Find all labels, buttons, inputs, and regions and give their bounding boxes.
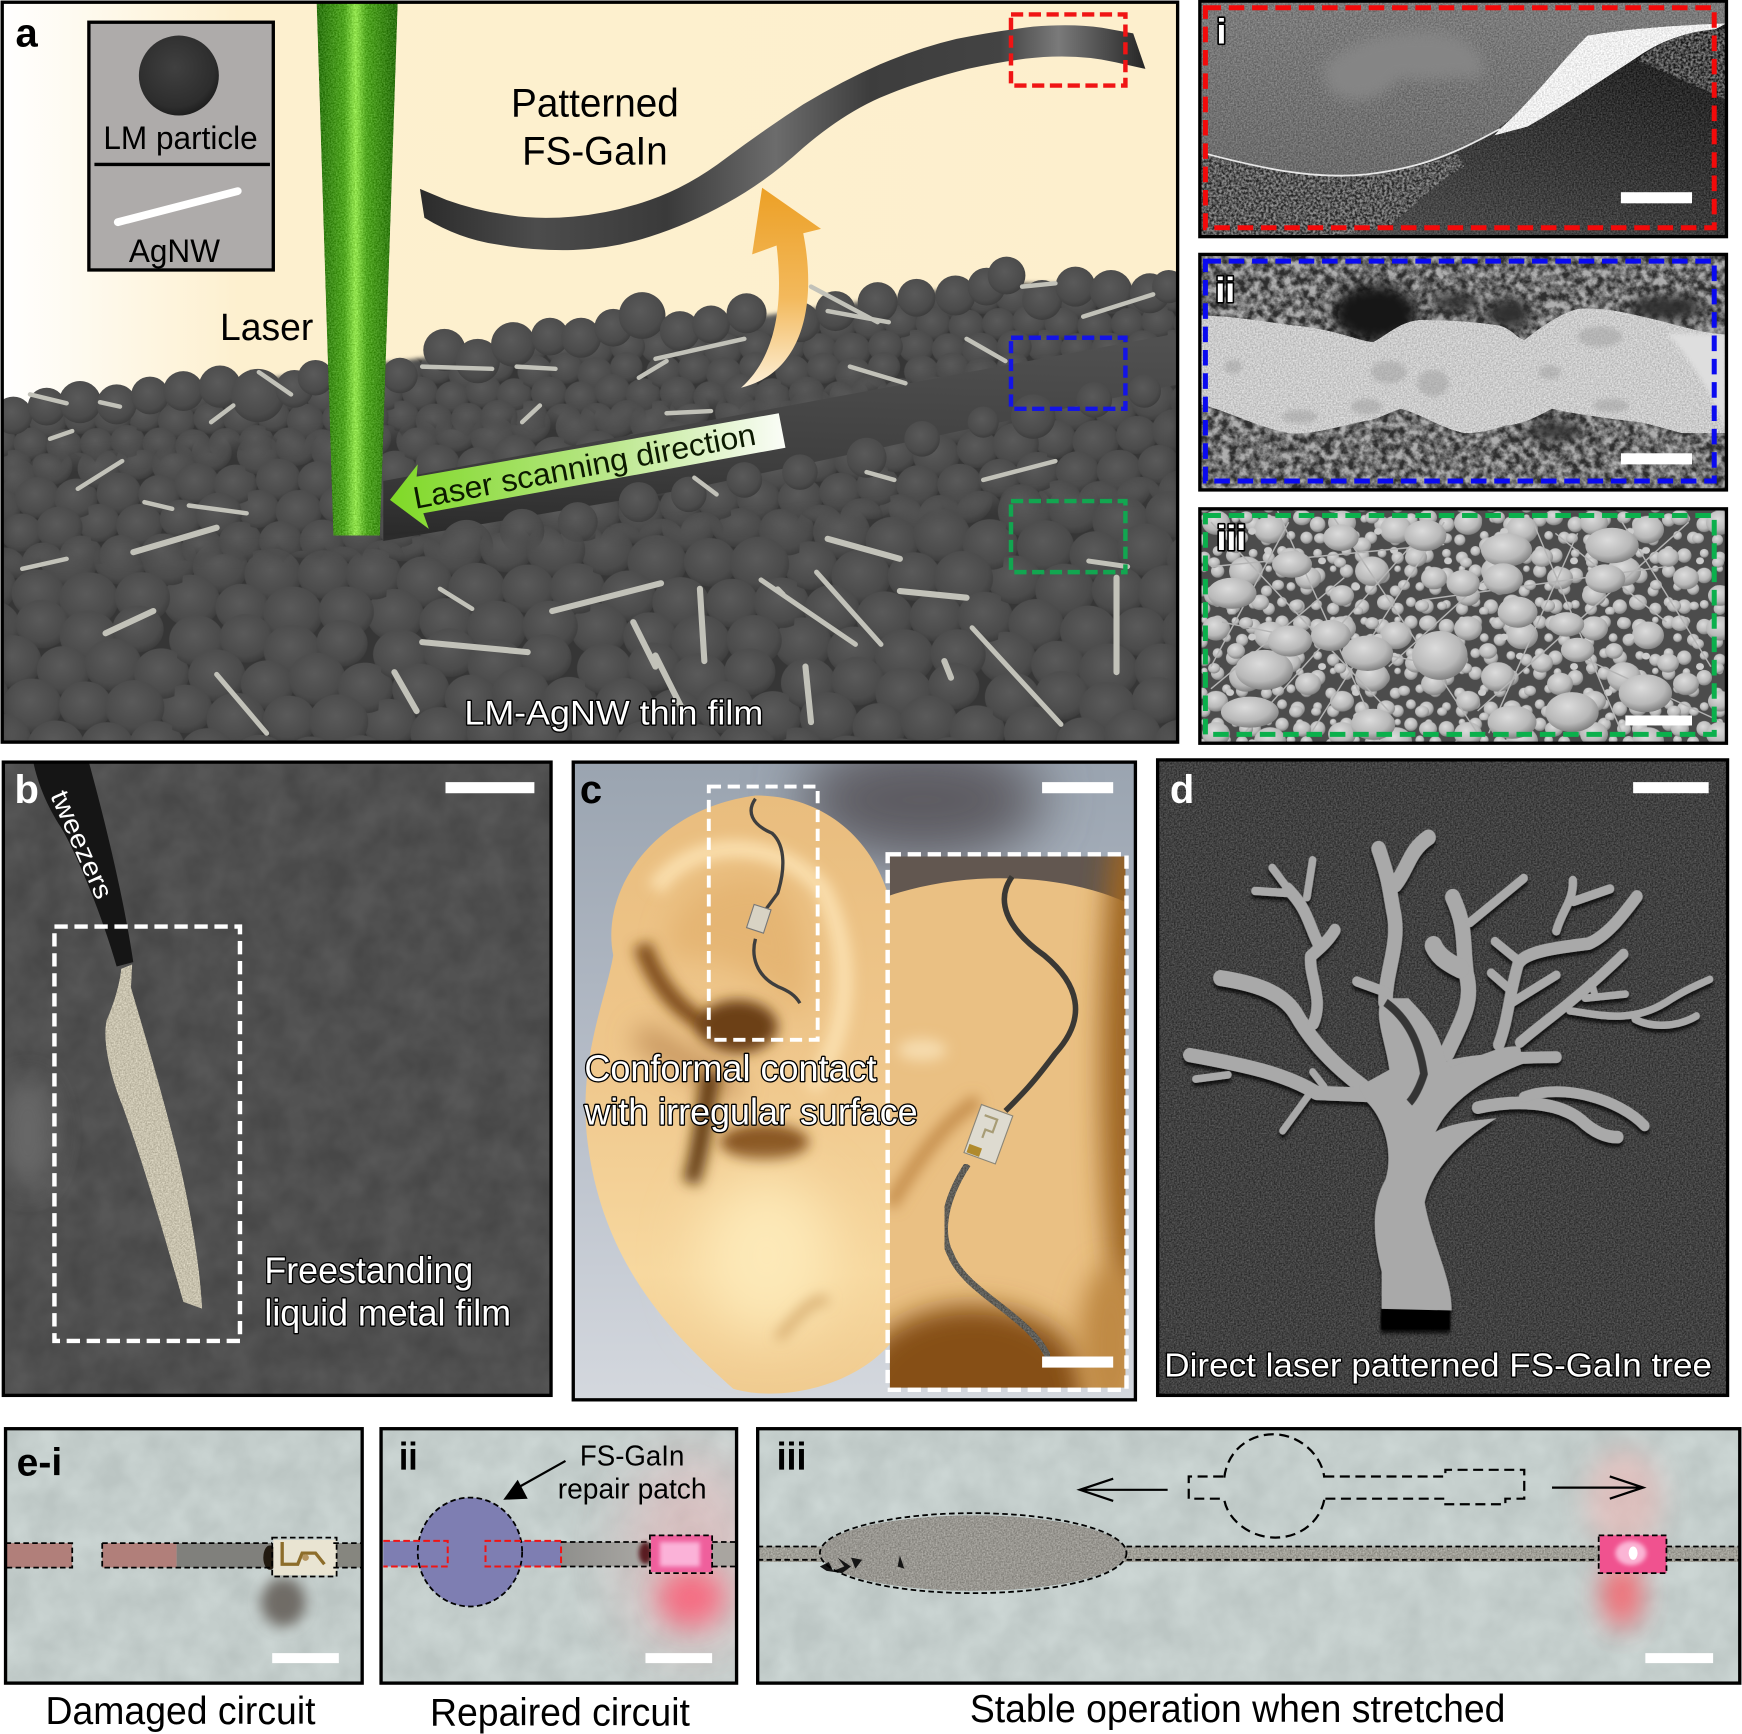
arrow to patch xyxy=(503,1461,565,1500)
inset wire xyxy=(1004,877,1076,1111)
label: freestanding film xyxy=(264,1250,511,1333)
icon: LM particle xyxy=(139,36,219,116)
green laser beam xyxy=(317,2,398,535)
panel c: conformal contact on ear xyxy=(572,760,1138,1402)
liquid metal film blade xyxy=(105,964,202,1309)
label: tree caption: Direct laser patterned FS-GaIn tree xyxy=(1164,1347,1712,1384)
scale bar xyxy=(1625,715,1692,725)
label: freestanding film: Freestanding xyxy=(264,1250,473,1291)
damaged trace segments xyxy=(6,1543,72,1568)
label: c: c xyxy=(580,768,602,812)
scale bar xyxy=(445,782,534,793)
label: i: i xyxy=(1217,11,1226,51)
blue repair patch xyxy=(383,1498,561,1606)
label: ii: ii xyxy=(399,1436,418,1479)
small LED xyxy=(747,904,771,933)
caption: damaged circuit: Damaged circuit xyxy=(46,1690,316,1733)
label: iii: iii xyxy=(777,1436,807,1479)
ear shape xyxy=(585,795,894,1394)
patterned FS-GaIn ribbon xyxy=(420,25,1145,250)
LM-AgNW film particles xyxy=(4,256,1176,568)
red region marker xyxy=(1011,14,1125,86)
scale bar xyxy=(1633,782,1709,793)
orange lift-off arrow xyxy=(741,188,821,388)
panel b: freestanding film xyxy=(1,762,551,1395)
arrow: stretch right xyxy=(1552,1476,1643,1499)
label: FS-GaIn repair patch xyxy=(558,1440,707,1506)
label: scanning direction: Laser scanning direction xyxy=(410,417,758,516)
blue region marker xyxy=(1011,338,1125,409)
label: Patterned FS-GaIn: FS-GaIn xyxy=(522,129,668,173)
label: tweezers: tweezers xyxy=(45,786,119,903)
red glow xyxy=(1586,1449,1662,1551)
caption: repaired circuit: Repaired circuit xyxy=(430,1691,690,1734)
label: FS-GaIn repair patch: FS-GaIn xyxy=(580,1440,684,1472)
label: iii: iii xyxy=(1217,518,1246,558)
panel a-i: SEM ribbon edge xyxy=(1200,1,1726,237)
label: a: a xyxy=(16,12,39,56)
label: Patterned FS-GaIn: Patterned xyxy=(511,82,679,126)
repaired trace xyxy=(561,1542,650,1566)
inset legend: LM particle and AgNW xyxy=(89,22,273,270)
label: d: d xyxy=(1170,768,1194,812)
FS-GaIn tree xyxy=(1190,837,1710,1330)
patterned channel in film xyxy=(383,333,1178,541)
scale bar xyxy=(1645,1653,1713,1663)
ear wire xyxy=(751,799,800,1003)
green dashed frame xyxy=(1205,515,1714,734)
label: conformal contact: with irregular surface xyxy=(583,1091,918,1132)
panel e-i: damaged circuit xyxy=(6,1429,362,1683)
label: LM-AgNW thin film: LM-AgNW thin film xyxy=(464,694,763,732)
icon: AgNW xyxy=(118,191,238,222)
panel a-ii: SEM wavy line xyxy=(1200,254,1726,490)
zoomed inset xyxy=(885,852,1129,1392)
lit LED xyxy=(639,1535,712,1573)
inset LED xyxy=(964,1105,1013,1164)
tweezers xyxy=(33,762,133,967)
panel d: laser patterned tree xyxy=(1158,760,1728,1395)
panel e-iii: stable when stretched xyxy=(758,1429,1740,1683)
scale bar inset xyxy=(1042,1356,1113,1368)
stretched patch xyxy=(820,1515,1127,1591)
scale bar top xyxy=(1042,782,1113,793)
arrow: stretch left xyxy=(1080,1479,1168,1501)
label: b: b xyxy=(14,768,39,812)
LED shadow xyxy=(261,1578,306,1626)
stretched trace xyxy=(758,1546,1740,1562)
scale bar xyxy=(272,1653,339,1663)
panel e-ii: repaired circuit xyxy=(381,1429,758,1683)
red dashed frame xyxy=(1205,8,1714,228)
label: e-i: e-i xyxy=(17,1441,62,1484)
green region marker xyxy=(1011,501,1125,572)
label: conformal contact xyxy=(583,1048,918,1132)
panel a-iii: SEM particles and nanowires xyxy=(1200,509,1726,743)
label: ii: ii xyxy=(1215,270,1235,310)
label: FS-GaIn repair patch: repair patch xyxy=(558,1474,707,1506)
silver nanowires xyxy=(22,283,1153,733)
dashed original shape xyxy=(1189,1434,1524,1538)
inner dashed box xyxy=(709,787,818,1040)
label: Patterned FS-GaIn xyxy=(511,82,679,173)
caption: stable operation: Stable operation when stretched xyxy=(970,1688,1505,1731)
scale bar xyxy=(1621,453,1692,464)
label: LM particle: LM particle xyxy=(103,120,258,156)
blue dashed frame xyxy=(1205,261,1714,481)
scale bar xyxy=(1621,192,1692,203)
panel a: laser patterning schematic xyxy=(0,2,1185,744)
label: AgNW: AgNW xyxy=(129,233,221,269)
lit LED xyxy=(1599,1535,1666,1573)
label: conformal contact: Conformal contact xyxy=(584,1048,877,1089)
label: freestanding film: liquid metal film xyxy=(264,1292,511,1333)
dashed box xyxy=(54,927,240,1341)
label: Laser: Laser xyxy=(220,307,313,349)
LED xyxy=(273,1540,337,1575)
scale bar xyxy=(645,1653,712,1663)
green scanning direction arrow xyxy=(390,413,785,529)
